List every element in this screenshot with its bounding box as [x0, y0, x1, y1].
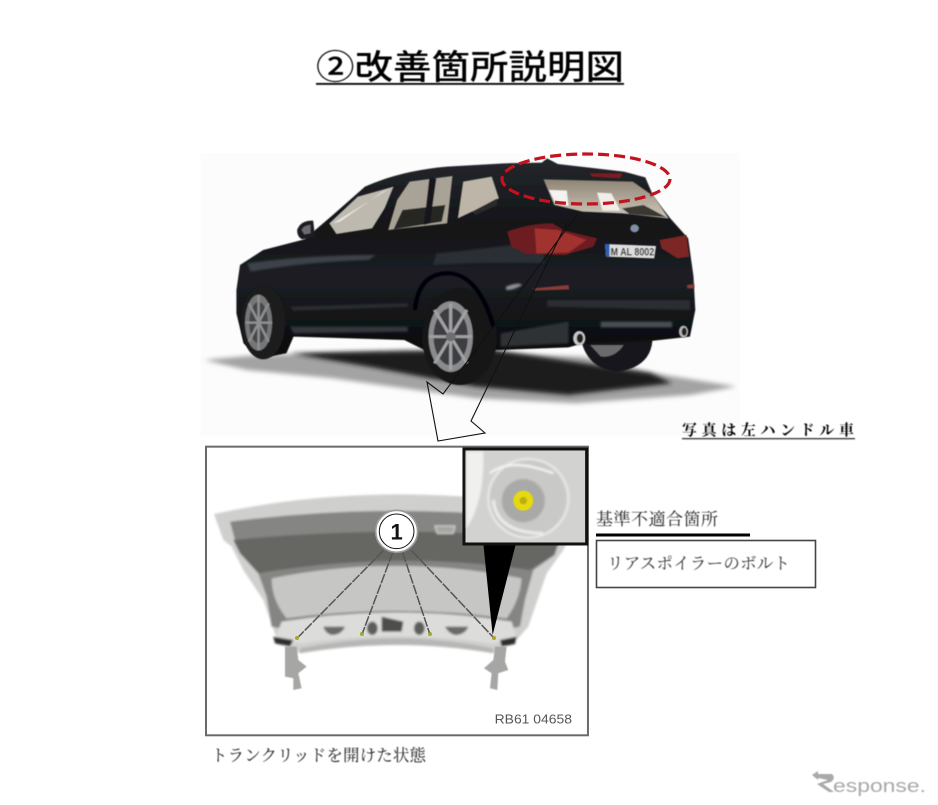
red dashed ellipse	[502, 154, 670, 204]
inset: bolt detail	[464, 449, 587, 544]
mirror	[297, 221, 315, 239]
panel: tailgate diagram	[206, 447, 588, 735]
leader lines	[299, 551, 493, 637]
number callout	[376, 510, 418, 552]
watermark: Response logo	[812, 771, 926, 796]
label: non-compliant location	[596, 510, 750, 536]
tail lights	[507, 223, 694, 291]
ground shadow	[204, 350, 736, 403]
tailgate illustration	[214, 494, 580, 653]
arrow	[427, 215, 577, 441]
title: ②改善箇所説明図	[316, 49, 624, 87]
car body	[236, 158, 695, 358]
black pointer	[483, 543, 516, 635]
body highlights	[247, 240, 690, 347]
callout: rear spoiler bolt: リアスポイラーのボルト	[607, 554, 790, 573]
car photo	[201, 153, 740, 437]
rear window	[544, 179, 669, 218]
wheel arch	[415, 273, 494, 327]
label: non-compliant location: 基準不適合箇所	[596, 510, 718, 529]
rear wheel	[422, 288, 497, 385]
caption: left-hand drive note: 写真は左ハンドル車	[682, 421, 854, 439]
part number: RB61 04658	[495, 711, 572, 726]
far rear wheel	[581, 340, 652, 372]
caption: open trunk lid: トランクリッドを開けた状態	[211, 746, 426, 765]
licence plate: M AL 8002	[611, 246, 655, 259]
front wheel	[241, 286, 285, 359]
number callout: 1	[391, 519, 403, 544]
watermark: Response logo: esponse.	[833, 776, 926, 796]
licence plate	[605, 224, 656, 259]
side windows	[329, 173, 669, 234]
exhausts	[573, 326, 688, 346]
hinges	[285, 647, 508, 690]
bolt markers	[295, 632, 496, 640]
callout: rear spoiler bolt	[596, 540, 816, 588]
